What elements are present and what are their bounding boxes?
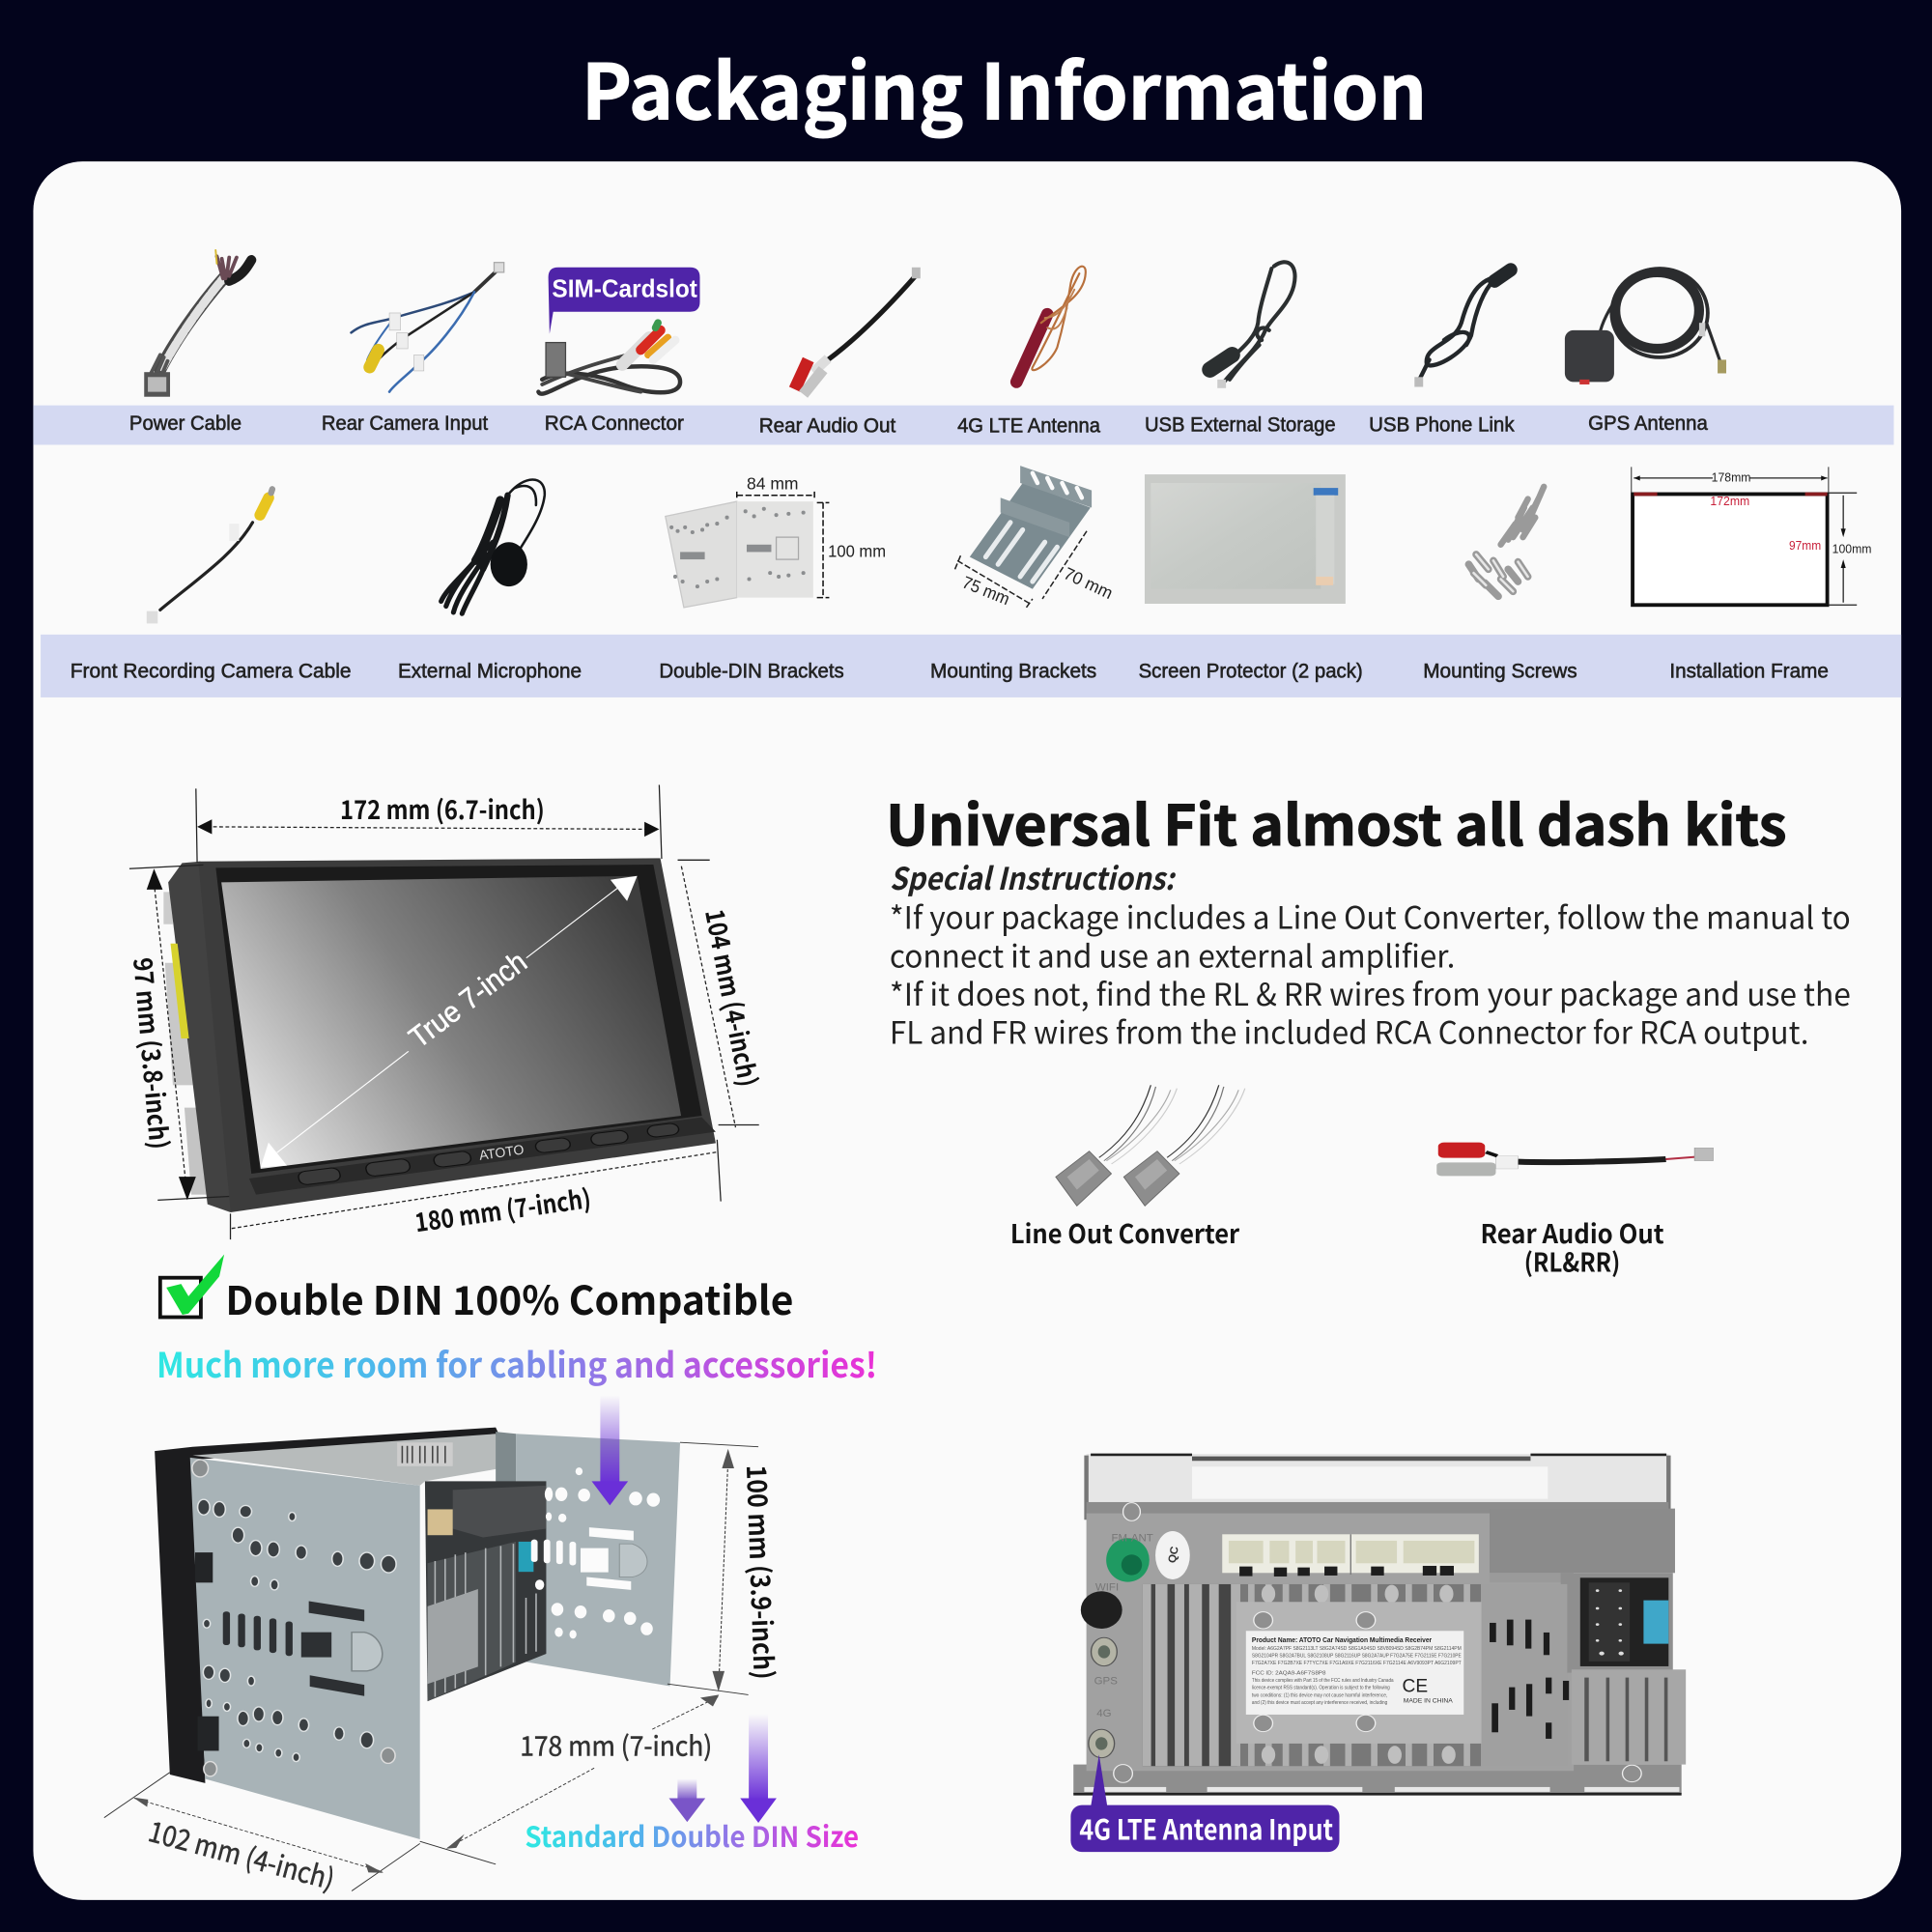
rear panel sticker text: Model: A6G2A7PF S8G2113LT S8G2A74SD S8G1A94SD S8V8094SD S8G2B74PM S8G2114PM — [1252, 1646, 1462, 1652]
rear panel sticker text: licence-exempt RSS standard(s). Operation is subject to the following — [1252, 1686, 1390, 1691]
item: mounting brackets — [955, 466, 1116, 609]
labels row 1: USB Phone Link — [1369, 413, 1515, 436]
text: True 7-inch: True 7-inch — [403, 946, 533, 1055]
rear panel sticker text: This device complies with Part 15 of the FCC rules and Industry Canada — [1252, 1678, 1394, 1684]
labels row 1: GPS Antenna — [1588, 412, 1708, 435]
rear panel markings — [1094, 1533, 1181, 1719]
item: external microphone — [441, 479, 545, 613]
labels row 2: Screen Protector (2 pack) — [1139, 661, 1363, 683]
rear panel sticker text: F7G2A7XE F7G2B7XE F7TYC7XE F7G1A9XE F7G2116XE F7G2114E A6V9093PT A6G2109PT — [1252, 1661, 1462, 1666]
text: ATOTO: ATOTO — [478, 1142, 525, 1163]
labels row 1: Rear Audio Out — [759, 415, 895, 438]
labels row 1 — [129, 412, 1708, 438]
item: installation frame: 172mm — [1710, 494, 1749, 508]
text block: special instructions — [890, 855, 1851, 1053]
item: installation frame: 100mm — [1833, 542, 1871, 556]
labels row 2: Mounting Brackets — [930, 661, 1096, 683]
callout: SIM-Cardslot — [549, 268, 699, 334]
item: mounting brackets: 70 mm — [1061, 563, 1116, 603]
labels row 2: Mounting Screws — [1423, 661, 1577, 683]
item: rear audio out (RL and RR) — [1436, 1143, 1713, 1176]
rear panel illustration — [1073, 1454, 1686, 1794]
item: double-DIN brackets — [666, 473, 886, 608]
text block: special instructions: *If it does not, find the RL & RR wires from your package and use the — [890, 971, 1851, 1015]
item: USB external storage cable — [1210, 262, 1295, 388]
labels row 2: Front Recording Camera Cable — [71, 661, 352, 683]
rear panel markings: QC — [1167, 1546, 1181, 1564]
labels row 1: Rear Camera Input — [322, 412, 488, 435]
label strip row 2 — [41, 635, 1901, 697]
dimension: 178 mm: 178 mm (7-inch) — [520, 1725, 712, 1765]
callout: 4G LTE antenna input: 4G LTE Antenna Input — [1079, 1807, 1333, 1848]
labels row 2: Double-DIN Brackets — [659, 661, 844, 683]
text block: special instructions: Special Instructions: — [890, 855, 1177, 899]
item: rear camera input cable — [352, 263, 504, 392]
arrow: right purple fade — [740, 1714, 777, 1823]
dimension: 97 mm: 97 mm (3.8-inch) — [126, 956, 180, 1151]
rear panel markings: 4G — [1096, 1708, 1112, 1719]
item: rear audio out cable — [795, 268, 921, 394]
text: gradient room message: Much more room for cabling and accessories! — [156, 1339, 877, 1388]
caption: Line Out Converter: Line Out Converter — [1010, 1213, 1239, 1251]
item: USB phone link cable — [1414, 270, 1511, 387]
labels row 2 — [71, 661, 1829, 683]
dimension: 172 mm: 172 mm (6.7-inch) — [340, 789, 545, 827]
label strip row 1 — [33, 406, 1893, 444]
caption: Rear Audio Out: Rear Audio Out — [1481, 1213, 1664, 1251]
dimension lines: front unit — [129, 784, 759, 1239]
item: power cable — [144, 250, 251, 397]
item: mounting brackets: 75 mm — [959, 573, 1012, 609]
rear panel markings: GPS — [1094, 1676, 1118, 1688]
rear panel markings: WIFI — [1095, 1582, 1119, 1594]
item: double-DIN brackets: 100 mm — [828, 542, 886, 561]
item: 4G LTE antenna — [1016, 267, 1086, 382]
text: standard double DIN size: Standard Double DIN Size — [525, 1815, 859, 1856]
item: GPS antenna — [1565, 269, 1726, 384]
dimension: 100 mm: 100 mm (3.9-inch) — [738, 1464, 785, 1680]
text block: special instructions: connect it and use an external amplifier. — [890, 932, 1455, 977]
title: Packaging Information — [582, 31, 1427, 142]
item: RCA connector — [538, 323, 680, 394]
labels row 2: Installation Frame — [1669, 661, 1829, 683]
item: installation frame — [1632, 467, 1871, 605]
item: installation frame: 178mm — [1712, 470, 1750, 485]
rear panel markings: FM-ANT — [1112, 1533, 1153, 1545]
rear panel sticker text: MADE IN CHINA — [1404, 1698, 1454, 1705]
arrow: small purple fade — [669, 1778, 705, 1822]
item: line out converter — [1056, 1085, 1245, 1206]
side bracket chassis illustration — [104, 1395, 777, 1891]
caption: RL and RR: (RL&RR) — [1524, 1241, 1620, 1279]
item: double-DIN brackets: 84 mm — [747, 473, 799, 493]
rear panel sticker text: two conditions: (1) this device may not cause harmful interference, — [1252, 1692, 1387, 1698]
item: front recording camera cable — [147, 489, 272, 623]
icon: checkbox with green check — [160, 1254, 224, 1318]
rear panel sticker text — [1252, 1635, 1462, 1706]
labels row 1: RCA Connector — [545, 412, 684, 435]
item: screen protector — [1145, 474, 1346, 604]
rear panel sticker text: S8G2104PR S8G2A7BUL S8G2108UP S8G2116UP S8G2A7AUP F7G2A75E F7G2115E F7G210PE — [1252, 1654, 1462, 1660]
callout: SIM-Cardslot: SIM-Cardslot — [552, 275, 697, 302]
labels row 1: 4G LTE Antenna — [957, 415, 1100, 438]
item: mounting screws — [1468, 487, 1544, 596]
dimension arrowheads — [147, 819, 659, 1200]
heading: universal fit: Universal Fit almost all dash kits — [886, 781, 1786, 862]
labels row 1: USB External Storage — [1145, 413, 1336, 436]
labels row 1: Power Cable — [129, 412, 242, 435]
labels row 2: External Microphone — [398, 661, 582, 683]
rear panel sticker text: and (2) this device must accept any interference received, including — [1252, 1700, 1387, 1706]
dimension: 102 mm: 102 mm (4-inch) — [145, 1809, 339, 1898]
text block: special instructions: *If your package includes a Line Out Converter, follow the manual to — [890, 895, 1851, 939]
front head unit illustration — [163, 858, 716, 1212]
item: installation frame: 97mm — [1789, 538, 1821, 553]
dimension: 180 mm: 180 mm (7-inch) — [412, 1178, 593, 1239]
arrow: upper purple fade — [591, 1395, 628, 1505]
text block: special instructions: FL and FR wires from the included RCA Connector for RCA output. — [890, 1009, 1808, 1053]
rear panel sticker text: CE — [1403, 1676, 1428, 1696]
rear panel sticker text: Product Name: ATOTO Car Navigation Multimedia Receiver — [1252, 1635, 1432, 1644]
callout: 4G LTE antenna input — [1070, 1754, 1339, 1852]
dimension: 104 mm: 104 mm (4-inch) — [697, 906, 769, 1090]
text: double DIN compatible: Double DIN 100% Compatible — [225, 1269, 793, 1326]
rear panel sticker text: FCC ID: 2AQA9-A6F7S8P8 — [1252, 1670, 1326, 1676]
